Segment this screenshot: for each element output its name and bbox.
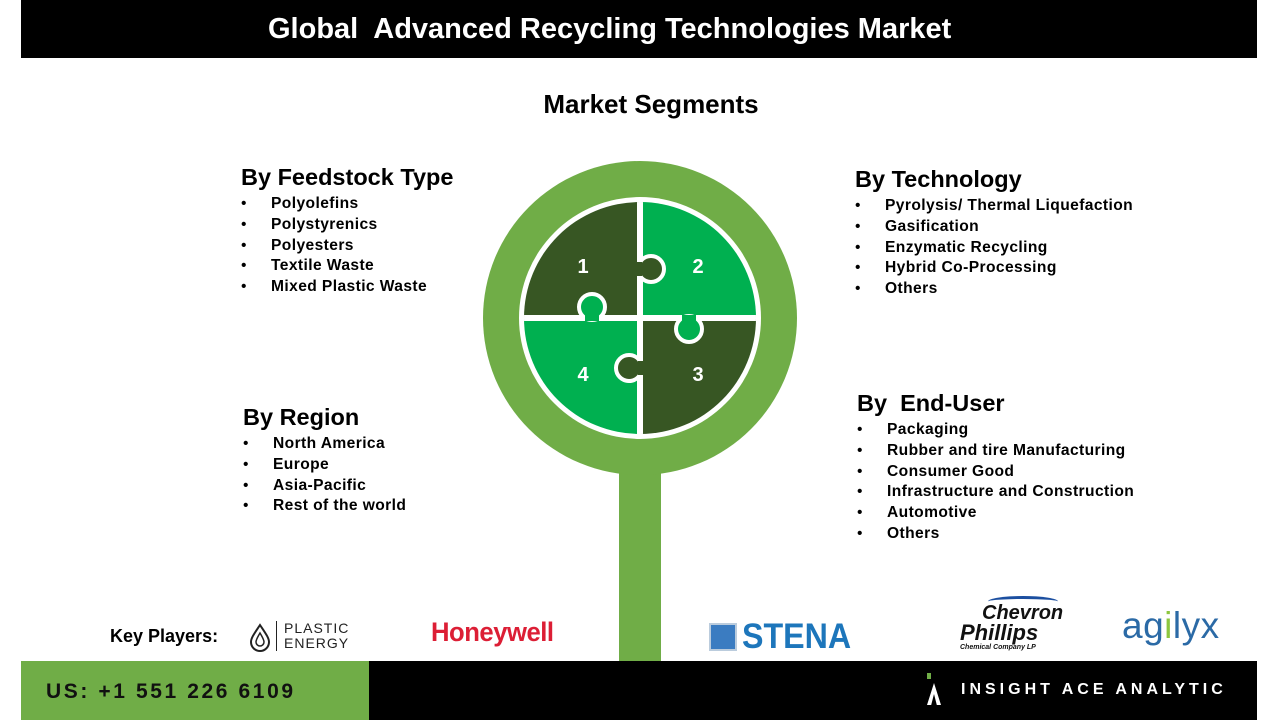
panel: region: Asia-Pacific	[273, 477, 366, 494]
magnifier puzzle graphic: 3	[692, 364, 704, 386]
logo: stena: STENA	[742, 617, 851, 656]
logo: chevron phillips: Chemical Company LP	[960, 644, 1036, 651]
logo: plastic energy	[250, 620, 349, 652]
panel: end-user: Automotive	[887, 504, 977, 521]
panel: feedstock: Polystyrenics	[271, 216, 378, 233]
panel: feedstock: By Feedstock Type	[241, 164, 453, 190]
logo: agilyx: agilyx	[1122, 605, 1220, 646]
panel: end-user: Rubber and tire Manufacturing	[887, 442, 1126, 459]
panel: end-user: Consumer Good	[887, 463, 1014, 480]
panel: technology: Hybrid Co-Processing	[885, 259, 1057, 276]
panel: region	[243, 404, 406, 514]
panel: end-user: By End-User	[857, 390, 1005, 416]
panel: feedstock: Polyesters	[271, 237, 354, 254]
magnifier puzzle graphic: 1	[577, 256, 589, 278]
header bar: Global Advanced Recycling Technologies Market	[268, 13, 951, 45]
panel: region: By Region	[243, 404, 359, 430]
panel: end-user: Infrastructure and Construction	[887, 483, 1134, 500]
magnifier puzzle graphic: 2	[692, 256, 704, 278]
footer: phone	[21, 661, 369, 720]
panel: region: Rest of the world	[273, 497, 406, 514]
icon: brand mark	[927, 673, 941, 705]
logo: chevron phillips	[960, 596, 1063, 651]
header bar	[21, 0, 1257, 58]
footer: phone: US: +1 551 226 6109	[46, 680, 296, 703]
footer: brand: INSIGHT ACE ANALYTIC	[961, 681, 1227, 698]
logo: chevron phillips: Chevron	[982, 602, 1063, 624]
panel: technology	[855, 166, 1133, 297]
magnifier puzzle graphic: 4	[577, 364, 589, 386]
panel: feedstock: Textile Waste	[271, 257, 374, 274]
panel: end-user	[857, 390, 1134, 542]
panel: region: North America	[273, 435, 385, 452]
panel: technology: Gasification	[885, 218, 979, 235]
panel: feedstock: Polyolefins	[271, 195, 359, 212]
panel: region: Europe	[273, 456, 329, 473]
key players label: Key Players:	[110, 626, 218, 646]
panel: technology: By Technology	[855, 166, 1022, 192]
panel: technology: Enzymatic Recycling	[885, 239, 1048, 256]
panel: end-user: Others	[887, 525, 940, 542]
subtitle: Market Segments	[543, 89, 759, 119]
footer: brand	[369, 661, 1257, 720]
magnifier puzzle graphic	[483, 161, 797, 661]
panel: end-user: Packaging	[887, 421, 969, 438]
logo: chevron phillips: Phillips	[960, 620, 1038, 645]
panel: technology: Pyrolysis/ Thermal Liquefaction	[885, 197, 1133, 214]
panel: feedstock	[241, 164, 453, 295]
panel: feedstock: Mixed Plastic Waste	[271, 278, 427, 295]
logo: plastic energy: PLASTIC	[284, 620, 349, 636]
logo: plastic energy: ENERGY	[284, 635, 349, 651]
logo: honeywell: Honeywell	[431, 617, 554, 647]
panel: technology: Others	[885, 280, 938, 297]
